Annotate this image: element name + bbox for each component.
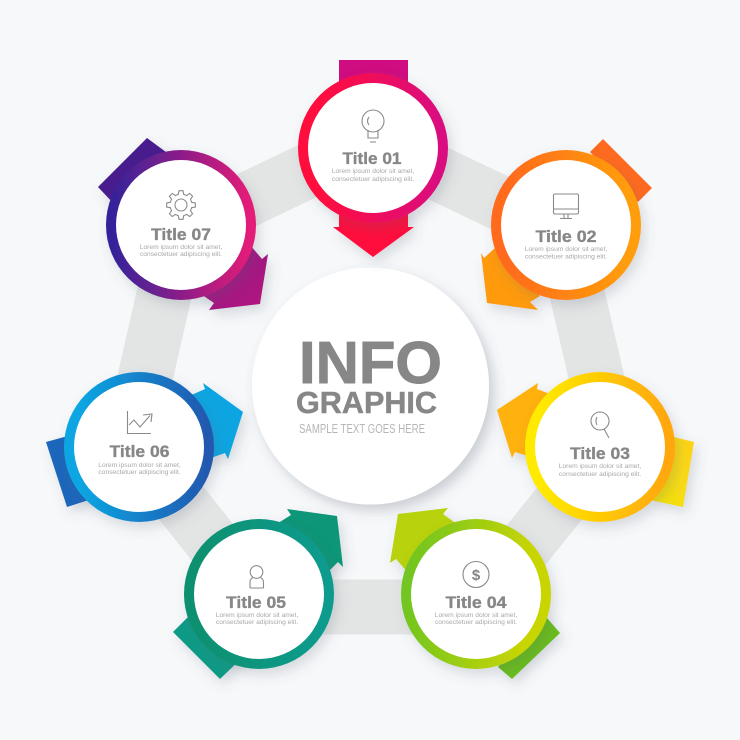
body 1: Lorem ipsum dolor sit amet, bbox=[332, 168, 414, 175]
white disc 1 bbox=[308, 83, 438, 213]
arrow 4 bbox=[390, 508, 458, 575]
body 4: consectetuer adipiscing elit. bbox=[435, 619, 517, 626]
body 2: Lorem ipsum dolor sit amet, bbox=[525, 246, 607, 253]
arrow 2 bbox=[481, 248, 540, 310]
body 5: Lorem ipsum dolor sit amet, bbox=[216, 612, 298, 619]
tail 1 bbox=[339, 60, 408, 110]
body 1: consectetuer adipiscing elit. bbox=[332, 176, 414, 183]
icon: magnifier bbox=[591, 412, 609, 438]
center heading: GRAPHIC: GRAPHIC bbox=[296, 385, 437, 420]
body 2: consectetuer adipiscing elit. bbox=[525, 254, 607, 260]
icon: gear bbox=[167, 191, 195, 219]
title 4: Title 04 bbox=[446, 593, 507, 612]
body 1 bbox=[332, 168, 414, 183]
white disc 5 bbox=[194, 529, 324, 659]
icon: light bulb bbox=[362, 110, 384, 142]
body 6: Lorem ipsum dolor sit amet, bbox=[98, 462, 181, 469]
node 4 bbox=[390, 508, 560, 679]
body 7: Lorem ipsum dolor sit amet, bbox=[140, 244, 222, 251]
ring 5 bbox=[184, 519, 334, 669]
node 3 bbox=[497, 372, 694, 522]
white disc 7 bbox=[116, 160, 246, 290]
body 6 bbox=[98, 462, 181, 476]
tail 2 bbox=[590, 139, 652, 202]
body 7 bbox=[140, 244, 222, 258]
tail 7 bbox=[98, 138, 170, 205]
node 1 bbox=[298, 60, 448, 257]
icon: dollar coin bbox=[463, 562, 489, 588]
body 4: Lorem ipsum dolor sit amet, bbox=[435, 612, 517, 619]
tail 4 bbox=[498, 610, 560, 679]
arrow 6 bbox=[180, 383, 243, 460]
body 3 bbox=[559, 463, 641, 478]
arrow 7 bbox=[195, 245, 268, 310]
ring 4 bbox=[401, 519, 551, 669]
ring 3 bbox=[525, 372, 675, 522]
body 7: consectetuer adipiscing elit. bbox=[140, 251, 222, 258]
title 6: Title 06 bbox=[110, 442, 170, 461]
white disc 6 bbox=[74, 382, 204, 512]
grey heptagon connector band bbox=[131, 141, 611, 607]
tail 5 bbox=[173, 610, 245, 679]
icon: line chart bbox=[128, 411, 152, 434]
title 2: Title 02 bbox=[536, 227, 596, 246]
title 7: Title 07 bbox=[151, 225, 211, 244]
title 5: Title 05 bbox=[226, 593, 286, 612]
node 2 bbox=[481, 139, 652, 310]
body 5: consectetuer adipiscing elit. bbox=[216, 619, 298, 626]
body 3: Lorem ipsum dolor sit amet, bbox=[559, 463, 641, 470]
icon: monitor bbox=[554, 194, 578, 218]
tail 6 bbox=[46, 434, 95, 507]
white disc 2 bbox=[501, 160, 631, 290]
center subtitle: SAMPLE TEXT GOES HERE bbox=[299, 422, 425, 436]
node 6 bbox=[46, 372, 243, 522]
center heading: INFO: INFO bbox=[299, 330, 442, 396]
arrow 3 bbox=[497, 383, 560, 458]
ring 1 bbox=[298, 73, 448, 223]
node 7 bbox=[98, 138, 268, 310]
body 4 bbox=[435, 612, 517, 626]
icon: person bbox=[250, 566, 264, 588]
ring 6 bbox=[64, 372, 214, 522]
icon: dollar coin: $ bbox=[472, 567, 481, 584]
white disc 4 bbox=[411, 529, 541, 659]
tail 3 bbox=[650, 436, 694, 507]
white disc 3 bbox=[535, 382, 665, 512]
arrow 5 bbox=[275, 509, 343, 575]
body 6: consectetuer adipiscing elit. bbox=[98, 469, 181, 476]
ring 7 bbox=[106, 150, 256, 300]
body 2 bbox=[525, 246, 607, 260]
arrow 1 bbox=[333, 205, 414, 257]
title 3: Title 03 bbox=[570, 444, 630, 463]
node 5 bbox=[173, 509, 343, 679]
ring 2 bbox=[491, 150, 641, 300]
body 3: consectetuer adipiscing elit. bbox=[559, 471, 641, 478]
title 1: Title 01 bbox=[342, 149, 402, 168]
center circle bbox=[252, 268, 489, 504]
body 5 bbox=[216, 612, 298, 626]
